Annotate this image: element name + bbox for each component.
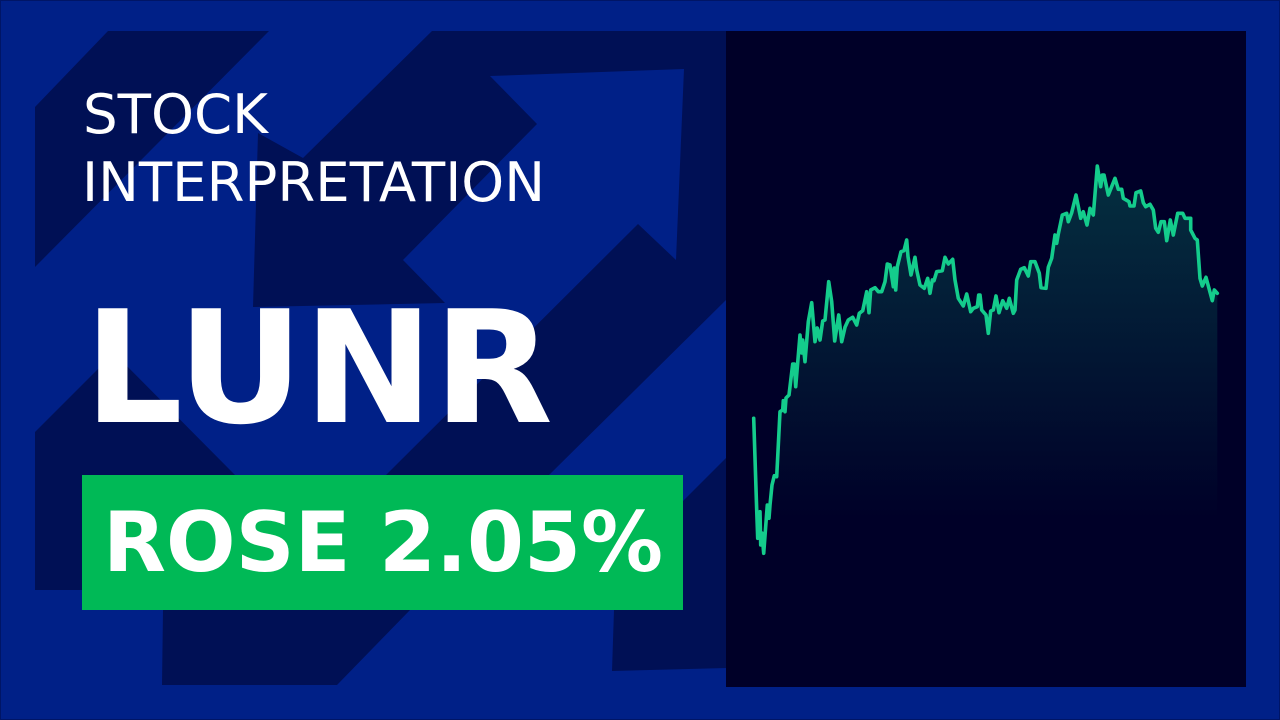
background arrow pattern [35, 31, 727, 685]
price line [754, 166, 1217, 553]
chart panel [726, 31, 1246, 687]
area under price line [754, 166, 1217, 553]
change badge: ROSE 2.05% [103, 494, 663, 591]
ticker symbol: LUNR [84, 277, 553, 459]
title: stock interpretation: INTERPRETATION [82, 151, 545, 214]
title: stock interpretation [82, 83, 545, 214]
title: stock interpretation: STOCK [83, 83, 270, 146]
change badge [82, 475, 683, 610]
